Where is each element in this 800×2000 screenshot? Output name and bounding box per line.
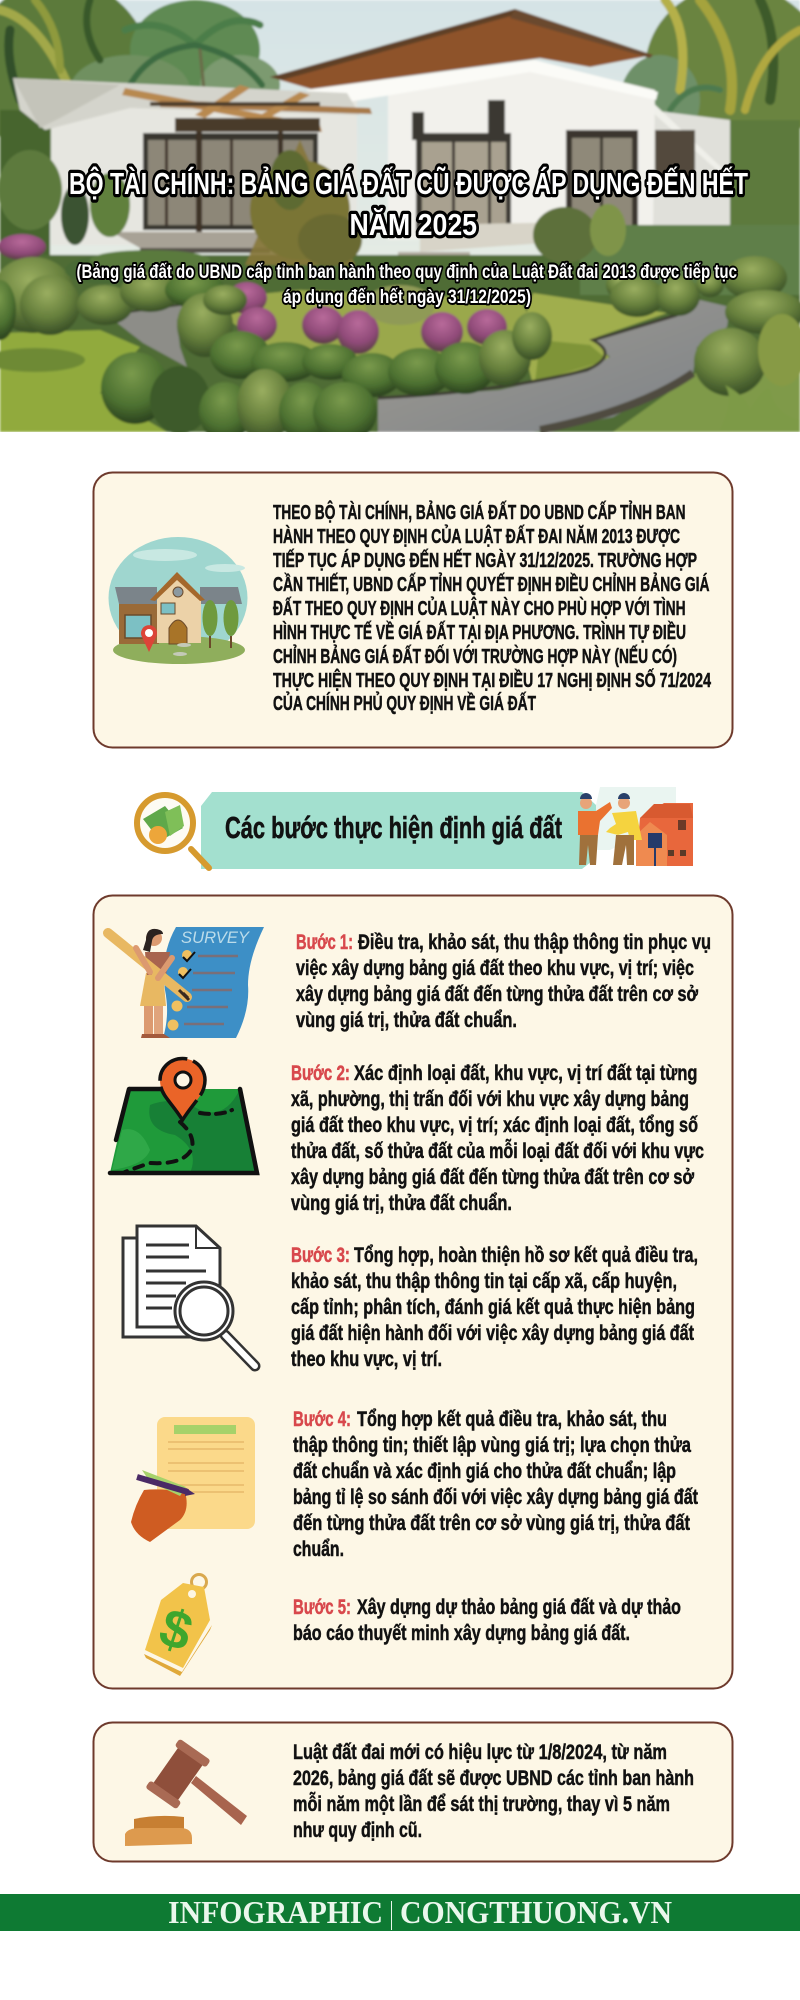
text: step 5: báo cáo thuyết minh xây dựng bảng giá đất. (293, 1622, 630, 1645)
text: step 4: Tổng hợp kết quả điều tra, khảo sát, thu (357, 1408, 667, 1431)
icon: magnifier with money (137, 795, 209, 868)
text: step 4: Bước 4: (293, 1408, 351, 1431)
illustration: two people and houses (578, 787, 693, 866)
text: step 4: chuẩn. (293, 1538, 344, 1561)
section heading banner (137, 787, 693, 869)
text: step 1: việc xây dựng bảng giá đất theo khu vực, vị trí; việc (296, 957, 694, 980)
text: step 4 (293, 1408, 698, 1561)
text: step 5: Xây dựng dự thảo bảng giá đất và dự thảo (357, 1596, 681, 1619)
text: step 3 (291, 1244, 698, 1371)
text: note (293, 1741, 694, 1842)
hero subtitle: áp dụng đến hết ngày 31/12/2025) (283, 287, 531, 308)
heading ribbon (201, 792, 596, 869)
text block: introduction: CỦA CHÍNH PHỦ QUY ĐỊNH VỀ GIÁ ĐẤT (273, 691, 536, 715)
icon: survey (108, 927, 264, 1038)
text: step 3: Bước 3: (291, 1244, 350, 1267)
text: step 1: Bước 1: (296, 931, 353, 954)
text: step 1: vùng giá trị, thửa đất chuẩn. (296, 1009, 517, 1032)
text: step 2: Xác định loại đất, khu vực, vị trí đất tại từng (354, 1062, 698, 1085)
text: step 5 (293, 1596, 681, 1645)
text: step 2: xã, phường, thị trấn đối với khu vực xây dựng bảng (291, 1088, 689, 1111)
text: note: mỗi năm một lần để sát thị trường, thay vì 5 năm (293, 1792, 670, 1816)
icon: price tag: $ (152, 1597, 200, 1663)
icon: gavel (125, 1739, 247, 1846)
icon: note and hand with pen (131, 1417, 255, 1542)
footer band: CONGTHUONG.VN (400, 1894, 672, 1930)
icon: survey: SURVEY (181, 928, 251, 947)
text: step 2 (291, 1062, 704, 1215)
footer band: INFOGRAPHIC (168, 1894, 383, 1930)
icon: document and magnifier (123, 1226, 255, 1366)
text: step 3: theo khu vực, vị trí. (291, 1348, 442, 1371)
heading text: Các bước thực hiện định giá đất (225, 810, 562, 845)
text: step 1 (296, 931, 711, 1032)
text: step 1: Điều tra, khảo sát, thu thập thông tin phục vụ (358, 931, 711, 954)
text: note: như quy định cũ. (293, 1819, 422, 1842)
text: step 2: vùng giá trị, thửa đất chuẩn. (291, 1192, 512, 1215)
footer band (0, 1894, 800, 1931)
text: note: 2026, bảng giá đất sẽ được UBND các tỉnh ban hành (293, 1767, 694, 1790)
text: step 4: đất chuẩn và xác định giá cho thửa đất chuẩn; lập (293, 1460, 676, 1483)
text: step 5: Bước 5: (293, 1596, 351, 1619)
text: step 2: xây dựng bảng giá đất đến từng thửa đất trên cơ sở (291, 1166, 694, 1189)
panel: introduction (94, 472, 732, 748)
hero subtitle (76, 262, 737, 308)
hero title: NĂM 2025 (350, 207, 477, 242)
text: step 3: khảo sát, thu thập thông tin tại cấp xã, cấp huyện, (291, 1270, 677, 1293)
hero photo: villa and garden (0, 0, 800, 442)
text: note: Luật đất đai mới có hiệu lực từ 1/8/2024, từ năm (293, 1741, 667, 1764)
text: step 3: cấp tỉnh; phân tích, đánh giá kết quả thực hiện bảng (291, 1296, 695, 1319)
text block: introduction (273, 500, 712, 715)
text: step 3: Tổng hợp, hoàn thiện hồ sơ kết quả điều tra, (354, 1244, 698, 1267)
text: step 4: thập thông tin; thiết lập vùng giá trị; lựa chọn thửa (293, 1434, 691, 1457)
hero title (69, 165, 748, 242)
icon: price tag (144, 1574, 212, 1676)
panel: new land law note (94, 1722, 732, 1862)
icon: map with pin (110, 1059, 257, 1173)
text: step 2: Bước 2: (291, 1062, 350, 1085)
text: step 4: đến từng thửa đất trên cơ sở vùng giá trị, thửa đất (293, 1512, 690, 1535)
icon: house with location pin (108, 537, 248, 664)
panel: steps (94, 896, 732, 1688)
